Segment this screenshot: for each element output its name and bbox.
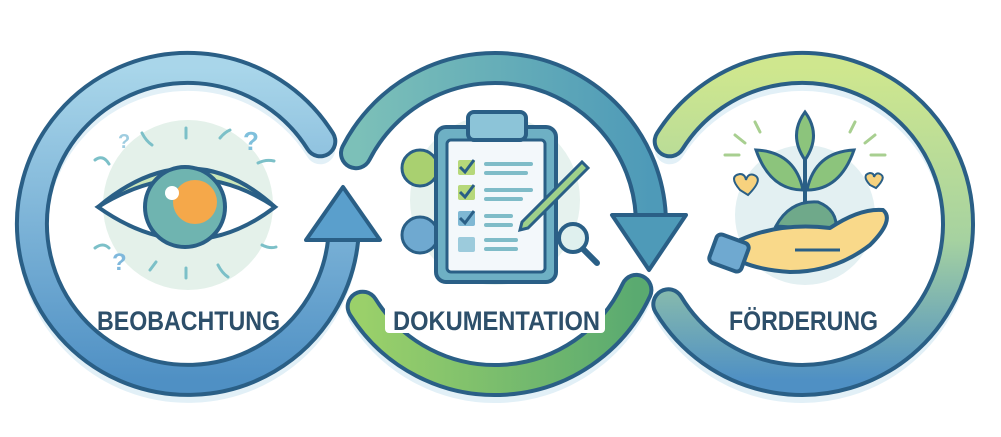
label: Dokumentation: DOKUMENTATION [393,306,600,336]
icon: eye [95,120,276,290]
icon: eye: ? [243,126,259,156]
label: Beobachtung: BEOBACHTUNG [97,306,280,336]
label: Förderung: FÖRDERUNG [729,306,878,336]
ring 3: Förderung [668,68,958,380]
shadows [32,76,958,388]
icon: eye: ? [112,249,127,276]
ring 2 top: Dokumentation arrow [356,68,686,270]
ring 1: Beobachtung arrow [32,68,380,380]
ring 2 bottom [363,290,636,380]
icon: hand with sprout [708,112,887,285]
label: Dokumentation [385,297,605,336]
icon: eye: ? [118,131,130,153]
icon: clipboard [402,112,597,285]
